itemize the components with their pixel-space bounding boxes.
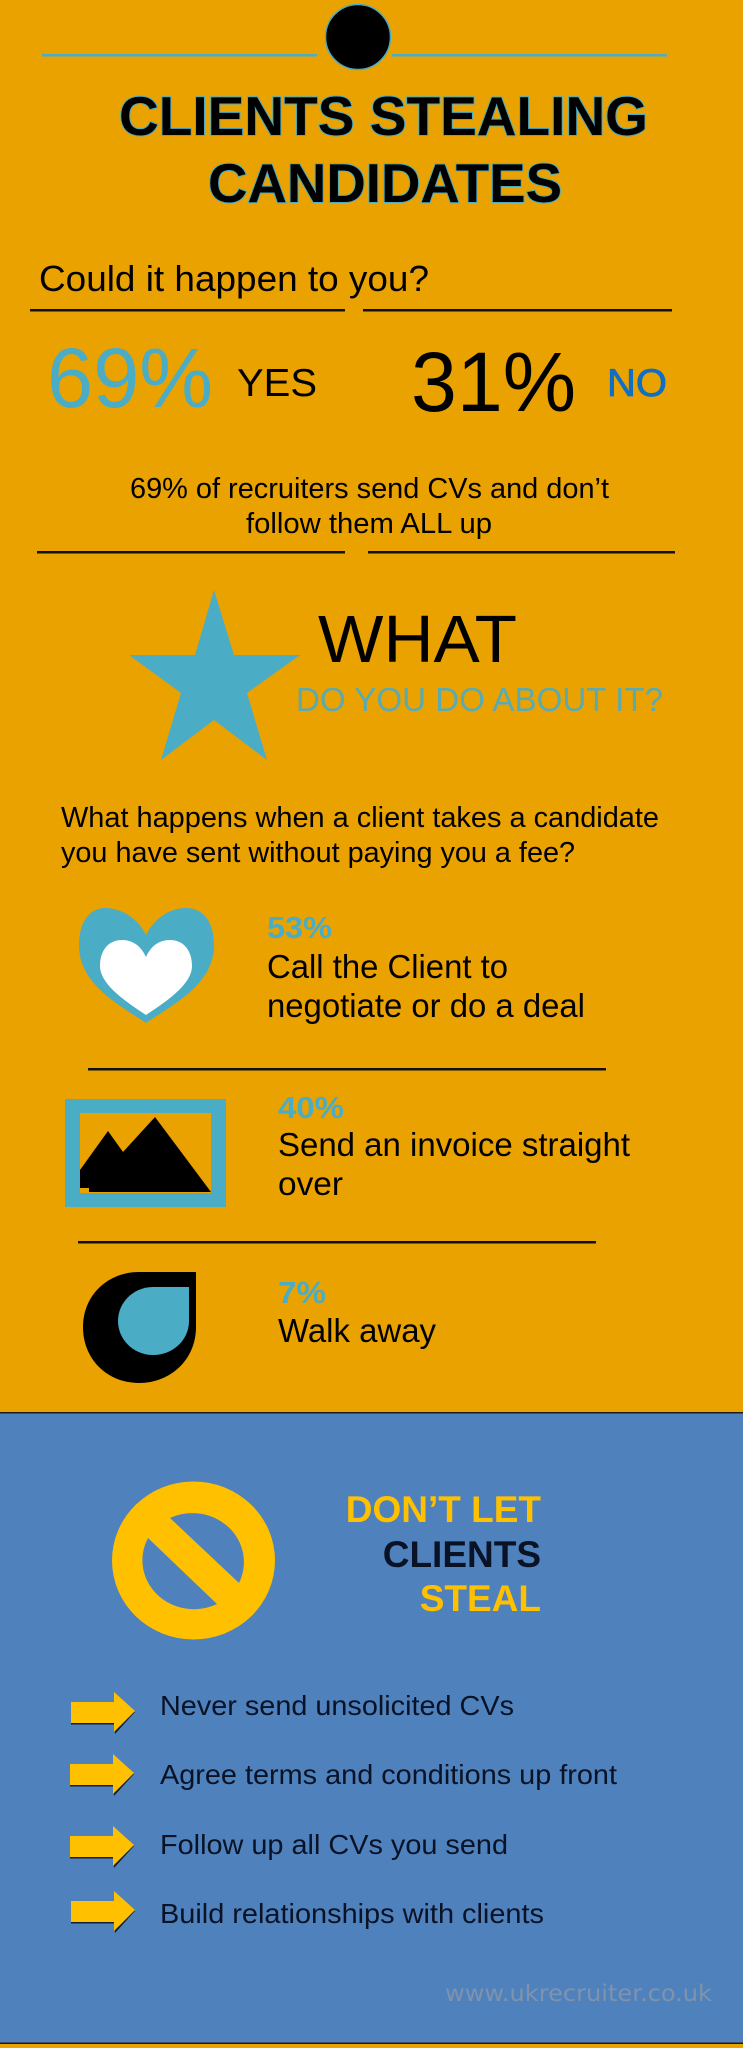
text: 69% of recruiters: 69% of recruiters send CVs and don’t: [130, 473, 609, 505]
stat: 53% call the client: [267, 910, 585, 1024]
stat: 53% call the client: Call the Client to: [267, 948, 508, 985]
stat: 7% walk away: 7%: [278, 1275, 326, 1310]
stat: 69% yes: YES: [237, 362, 317, 405]
arrow 4: [71, 1891, 135, 1933]
icon: top circle with rule: [42, 4, 667, 70]
text: question: What happens when a client takes a candidate: [61, 802, 659, 834]
icon: drop: [83, 1272, 196, 1383]
icon: star: [129, 590, 300, 760]
stat: 40% send an invoice: Send an invoice straight: [278, 1126, 630, 1163]
arrow 3: [70, 1826, 134, 1868]
text: 69% of recruiters: [130, 473, 609, 540]
panel: blue section: [0, 1412, 743, 2048]
stat: 7% walk away: [278, 1275, 436, 1349]
title: CLIENTS STEALING: [119, 85, 648, 147]
heading: do you do about it: DO YOU DO ABOUT IT?: [296, 681, 663, 718]
icon: heart: [79, 908, 214, 1023]
arrow 2: [70, 1754, 134, 1796]
stat: 31% no: 31%: [411, 335, 576, 429]
stat: 69% yes: 69%: [47, 331, 213, 425]
stat: 53% call the client: 53%: [267, 910, 332, 945]
title: [119, 85, 648, 214]
stat: 31% no: [411, 335, 667, 429]
stat: 69% yes: [47, 331, 317, 425]
text: tip 2: Agree terms and conditions up front: [160, 1759, 617, 1790]
stat: 7% walk away: Walk away: [278, 1312, 436, 1349]
text: tip 1: Never send unsolicited CVs: [160, 1690, 514, 1721]
arrow 1: [71, 1692, 135, 1734]
text: question: you have sent without paying you a fee?: [61, 837, 575, 869]
heading: don't let clients steal: [346, 1489, 541, 1619]
heading: could it happen to you: Could it happen to you?: [39, 258, 429, 299]
text: tip 4: Build relationships with clients: [160, 1898, 544, 1929]
title: CANDIDATES: [208, 152, 562, 214]
text: question: [61, 802, 659, 869]
heading: don't let clients steal: CLIENTS: [383, 1534, 541, 1575]
stat: 31% no: NO: [607, 362, 667, 405]
icon: prohibition sign: [112, 1482, 275, 1640]
footer url: www.ukrecruiter.co.uk: [445, 1981, 713, 2007]
stat: 40% send an invoice: 40%: [278, 1090, 344, 1125]
stat: 40% send an invoice: [278, 1090, 630, 1202]
stat: 40% send an invoice: over: [278, 1165, 343, 1202]
heading: don't let clients steal: DON’T LET: [346, 1489, 541, 1530]
heading: don't let clients steal: STEAL: [420, 1578, 541, 1619]
text: tip 3: Follow up all CVs you send: [160, 1829, 508, 1860]
stat: 53% call the client: negotiate or do a deal: [267, 987, 585, 1024]
heading: what: WHAT: [318, 602, 517, 677]
panel: orange background: [0, 0, 743, 1413]
text: 69% of recruiters: follow them ALL up: [246, 508, 492, 540]
icon: picture frame with mountains: [65, 1099, 226, 1207]
